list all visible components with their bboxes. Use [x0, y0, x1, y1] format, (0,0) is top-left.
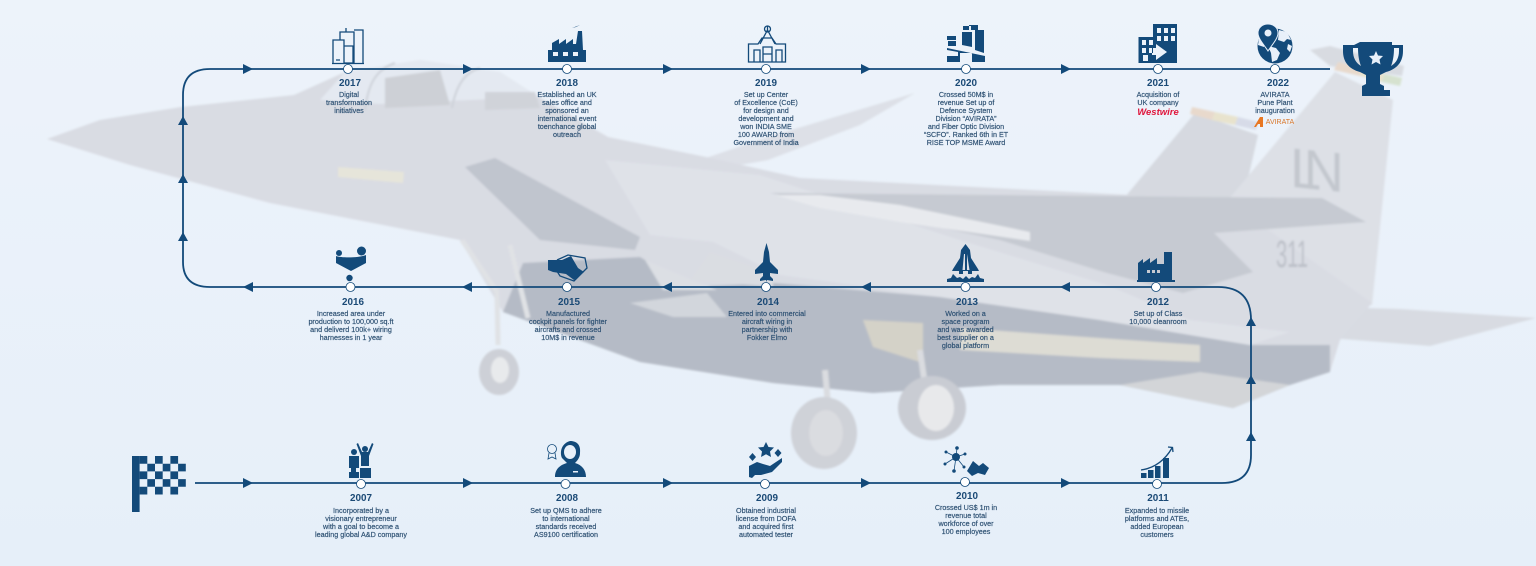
year: 2009: [756, 493, 778, 504]
description: development and: [738, 114, 794, 123]
description: automated tester: [739, 530, 794, 539]
fuselage: [47, 60, 1372, 408]
description: Incorporated by a: [333, 506, 389, 515]
description: AS9100 certification: [534, 530, 598, 539]
description: Government of India: [733, 138, 799, 147]
year: 2016: [342, 297, 364, 308]
description: revenue Set up of: [938, 98, 994, 107]
main gear struts: [825, 350, 925, 405]
year: 2010: [956, 491, 978, 502]
description: and Fiber Optic Division: [928, 122, 1004, 131]
description: harnesses in 1 year: [320, 333, 383, 342]
description: sponsored an: [545, 106, 589, 115]
left vertical fin: [1125, 113, 1258, 205]
cockpit interior: [385, 70, 450, 108]
description: Manufactured: [546, 309, 590, 318]
icon: funnel: [336, 246, 366, 281]
description: revenue total: [945, 511, 987, 520]
description: added European: [1130, 522, 1184, 531]
milestone 2011: [1125, 447, 1189, 539]
icon: hand with stars: [749, 442, 782, 478]
right vertical fin: [1228, 72, 1393, 305]
description: Acquisition of: [1137, 90, 1179, 99]
description: initiatives: [334, 106, 364, 115]
description: Digital: [339, 90, 359, 99]
description: Set up Center: [744, 90, 789, 99]
milestone 2019: [733, 26, 799, 147]
milestone 2020: [924, 25, 1009, 147]
description: Division “AVIRATA”: [935, 114, 997, 123]
logo: Westwire: Westwire: [1137, 107, 1179, 118]
milestone 2008: [530, 441, 602, 539]
icon: industrial plant: [947, 25, 985, 62]
far wing tip: [700, 93, 915, 165]
description: 10,000 cleanroom: [1129, 317, 1187, 326]
milestone 2013: [937, 244, 994, 350]
year: 2014: [757, 297, 779, 308]
description: best supplier on a: [937, 333, 994, 342]
milestone 2016: [308, 246, 394, 342]
description: to international: [542, 514, 590, 523]
description: Crossed 50M$ in: [939, 90, 993, 99]
year: 2022: [1267, 78, 1289, 89]
description: global platform: [942, 341, 989, 350]
timeline path: [183, 69, 1330, 483]
description: RISE TOP MSME Award: [927, 138, 1005, 147]
fin lettering: LN: [1290, 136, 1344, 204]
description: Obtained industrial: [736, 506, 796, 515]
description: with a goal to become a: [322, 522, 399, 531]
logo: Avirata: AVIRATA: [1266, 119, 1295, 126]
description: Defence System: [940, 106, 992, 115]
description: won INDIA SME: [739, 122, 792, 131]
year: 2012: [1147, 297, 1169, 308]
description: toenchance global: [538, 122, 597, 131]
nose landing gear: [462, 240, 528, 345]
description: Pune Plant: [1257, 98, 1293, 107]
icon: network and handshake: [944, 446, 989, 476]
description: Entered into commercial: [728, 309, 806, 318]
fin missile pod: [1310, 46, 1404, 76]
description: standards received: [536, 522, 596, 531]
icon: growth chart: [1141, 447, 1173, 478]
description: Expanded to missile: [1125, 506, 1189, 515]
icon: globe with pin: [1258, 24, 1292, 64]
missile: [775, 195, 1030, 241]
milestone 2018: [537, 25, 597, 139]
description: 10M$ in revenue: [541, 333, 595, 342]
icon: acquisition buildings: [1138, 24, 1177, 63]
icon: person with award: [548, 441, 586, 477]
description: “SCFO”. Ranked 6th in ET: [924, 130, 1009, 139]
canopy frames: [365, 63, 480, 110]
description: workforce of over: [937, 519, 994, 528]
description: AVIRATA: [1260, 90, 1290, 99]
description: and acquired first: [738, 522, 794, 531]
tailplane: [1255, 305, 1536, 346]
description: and was awarded: [937, 325, 994, 334]
description: Set up of Class: [1134, 309, 1183, 318]
description: 100 employees: [942, 527, 991, 536]
nose wheel: [479, 349, 519, 395]
intake lower panels: [645, 260, 717, 290]
icon: handshake: [548, 255, 587, 281]
milestone 2010: [935, 446, 997, 536]
milestone 2009: [736, 442, 796, 539]
description: 100 AWARD from: [738, 130, 794, 139]
milestone 2015: [529, 255, 608, 342]
description: aircraft wiring in: [742, 317, 792, 326]
description: Established an UK: [537, 90, 597, 99]
description: for design and: [743, 106, 789, 115]
description: sales office and: [542, 98, 592, 107]
year: 2015: [558, 297, 580, 308]
description: Worked on a: [945, 309, 986, 318]
main wing: [770, 193, 1366, 293]
lower body shadow: [503, 257, 1330, 408]
milestone 2017: [326, 28, 372, 115]
background fighter jet: [47, 46, 1536, 469]
trophy icon: [1343, 42, 1403, 96]
description: production to 100,000 sq.ft: [308, 317, 394, 326]
year: 2021: [1147, 78, 1169, 89]
description: of Excellence (CoE): [734, 98, 798, 107]
milestone 2021: [1137, 24, 1179, 118]
main wheel right: [898, 376, 966, 440]
description: leading global A&D company: [315, 530, 407, 539]
year: 2013: [956, 297, 978, 308]
description: UK company: [1137, 98, 1179, 107]
nose marking: [338, 167, 404, 183]
canopy: [320, 60, 539, 104]
year: 2007: [350, 493, 372, 504]
fin tip stripes: [1190, 62, 1402, 130]
description: and deliverd 100k+ wiring: [310, 325, 392, 334]
description: Increased area under: [317, 309, 386, 318]
icon: factory: [548, 25, 586, 62]
icon: factory: [1137, 252, 1175, 282]
ventral fin: [1120, 372, 1290, 408]
icon: tower building: [748, 26, 786, 62]
year: 2019: [755, 78, 777, 89]
description: international event: [538, 114, 596, 123]
icon: people on podiums: [349, 443, 374, 478]
description: visionary entrepreneur: [325, 514, 397, 523]
milestone 2012: [1129, 252, 1187, 326]
icon: office buildings: [332, 28, 364, 64]
year: 2011: [1147, 493, 1169, 504]
year: 2018: [556, 78, 578, 89]
description: Set up QMS to adhere: [530, 506, 602, 515]
flow arrows: [178, 64, 1256, 488]
description: customers: [1140, 530, 1174, 539]
main wheel left: [791, 397, 857, 469]
description: license from DOFA: [736, 514, 796, 523]
icon: space shuttle: [947, 244, 984, 282]
wing root panel: [465, 158, 640, 250]
year: 2017: [339, 78, 361, 89]
intake light body: [605, 160, 1290, 345]
description: platforms and ATEs,: [1125, 514, 1189, 523]
description: Crossed US$ 1m in: [935, 503, 997, 512]
milestone 2022: [1254, 24, 1295, 127]
milestone 2014: [728, 243, 806, 342]
description: partnership with: [742, 325, 792, 334]
description: Fokker Elmo: [747, 333, 787, 342]
beige band: [960, 328, 1200, 362]
description: transformation: [326, 98, 372, 107]
start flag icon: [132, 456, 186, 512]
description: cockpit panels for fighter: [529, 317, 608, 326]
milestone 2007: [315, 443, 407, 539]
year: 2008: [556, 493, 578, 504]
description: outreach: [553, 130, 581, 139]
background fighter jet: 311: [1276, 234, 1308, 276]
icon: fighter jet: [755, 243, 778, 282]
description: space program: [942, 317, 989, 326]
description: inauguration: [1255, 106, 1295, 115]
description: aircrafts and crossed: [535, 325, 601, 334]
year: 2020: [955, 78, 977, 89]
